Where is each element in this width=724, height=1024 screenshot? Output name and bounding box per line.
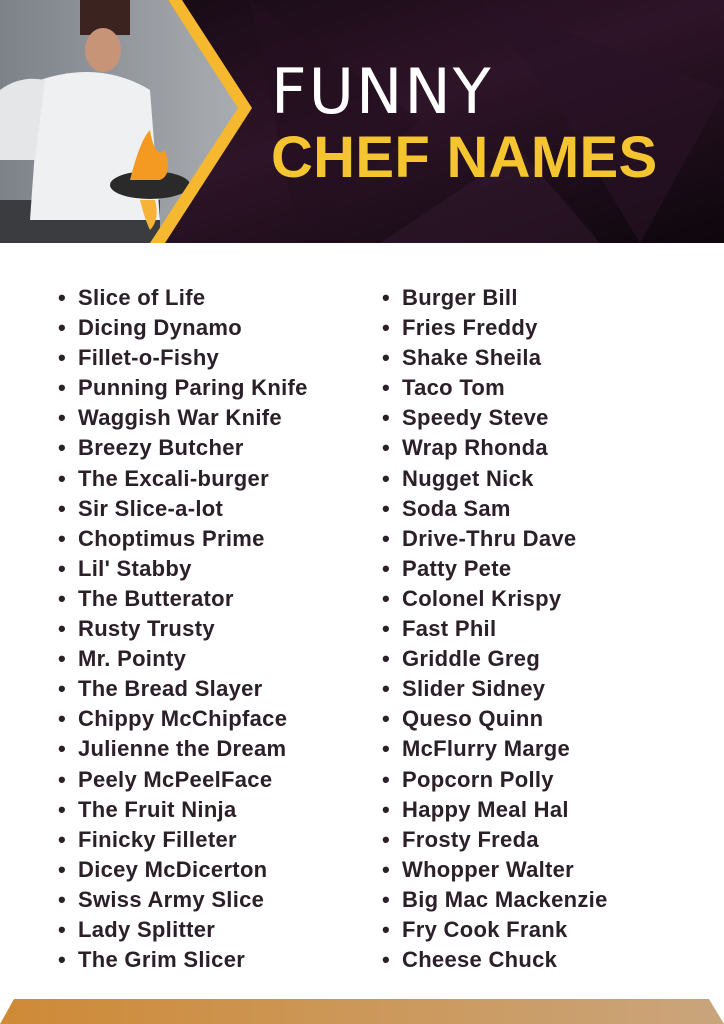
- list: left column: Mr. Pointy: [78, 646, 186, 671]
- list: right column: Fry Cook Frank: [402, 917, 568, 942]
- list: right column: Queso Quinn: [402, 706, 543, 731]
- list: left column: Finicky Filleter: [78, 827, 237, 852]
- list: right column: Fries Freddy: [402, 315, 538, 340]
- list: left column: Breezy Butcher: [78, 435, 244, 460]
- list: right column: Frosty Freda: [402, 827, 539, 852]
- list: right column: Wrap Rhonda: [402, 435, 548, 460]
- photo: chef: [0, 0, 240, 243]
- list: left column: Julienne the Dream: [78, 736, 286, 761]
- list: right column: McFlurry Marge: [402, 736, 570, 761]
- list: left column: Punning Paring Knife: [78, 375, 308, 400]
- list: right column: Shake Sheila: [402, 345, 541, 370]
- list: right column: Big Mac Mackenzie: [402, 887, 608, 912]
- list: right column: Happy Meal Hal: [402, 797, 569, 822]
- list: right column: Popcorn Polly: [402, 766, 554, 792]
- list: right column: [382, 285, 608, 972]
- title: CHEF NAMES: [271, 125, 657, 190]
- list: left column: Peely McPeelFace: [78, 766, 272, 792]
- list: left column: Lady Splitter: [78, 917, 215, 942]
- list: left column: Chippy McChipface: [78, 706, 287, 731]
- list: left column: Rusty Trusty: [78, 616, 215, 641]
- list: right column: Colonel Krispy: [402, 586, 561, 611]
- title: [271, 55, 657, 190]
- list: left column: The Butterator: [78, 586, 234, 611]
- list: left column: The Fruit Ninja: [78, 797, 236, 822]
- list: left column: Fillet-o-Fishy: [78, 345, 219, 370]
- list: right column: Fast Phil: [402, 616, 496, 641]
- title: FUNNY: [271, 55, 493, 128]
- list: left column: Waggish War Knife: [78, 405, 282, 430]
- chevron: [150, 0, 252, 243]
- list: left column: Dicey McDicerton: [78, 857, 267, 882]
- list: left column: Dicing Dynamo: [78, 315, 242, 340]
- footer bar: [0, 999, 724, 1024]
- list: right column: Whopper Walter: [402, 857, 574, 882]
- list: right column: Cheese Chuck: [402, 947, 557, 972]
- list: left column: Lil' Stabby: [78, 556, 192, 581]
- header banner: [0, 0, 724, 243]
- list: right column: Slider Sidney: [402, 676, 545, 701]
- list: right column: Drive-Thru Dave: [402, 526, 576, 551]
- list: right column: Speedy Steve: [402, 405, 549, 430]
- list: left column: [58, 285, 308, 972]
- list: left column: The Bread Slayer: [78, 676, 263, 701]
- list: right column: Griddle Greg: [402, 646, 540, 671]
- list: left column: The Grim Slicer: [78, 947, 245, 972]
- list: left column: Sir Slice-a-lot: [78, 496, 223, 521]
- list: right column: Nugget Nick: [402, 466, 534, 491]
- list: right column: Taco Tom: [402, 375, 505, 400]
- list: left column: Swiss Army Slice: [78, 887, 264, 912]
- list: right column: Burger Bill: [402, 285, 518, 310]
- list: right column: Patty Pete: [402, 556, 511, 581]
- list: left column: The Excali-burger: [78, 466, 269, 491]
- list: left column: Slice of Life: [78, 285, 205, 310]
- list: left column: Choptimus Prime: [78, 526, 265, 551]
- list: right column: Soda Sam: [402, 496, 511, 521]
